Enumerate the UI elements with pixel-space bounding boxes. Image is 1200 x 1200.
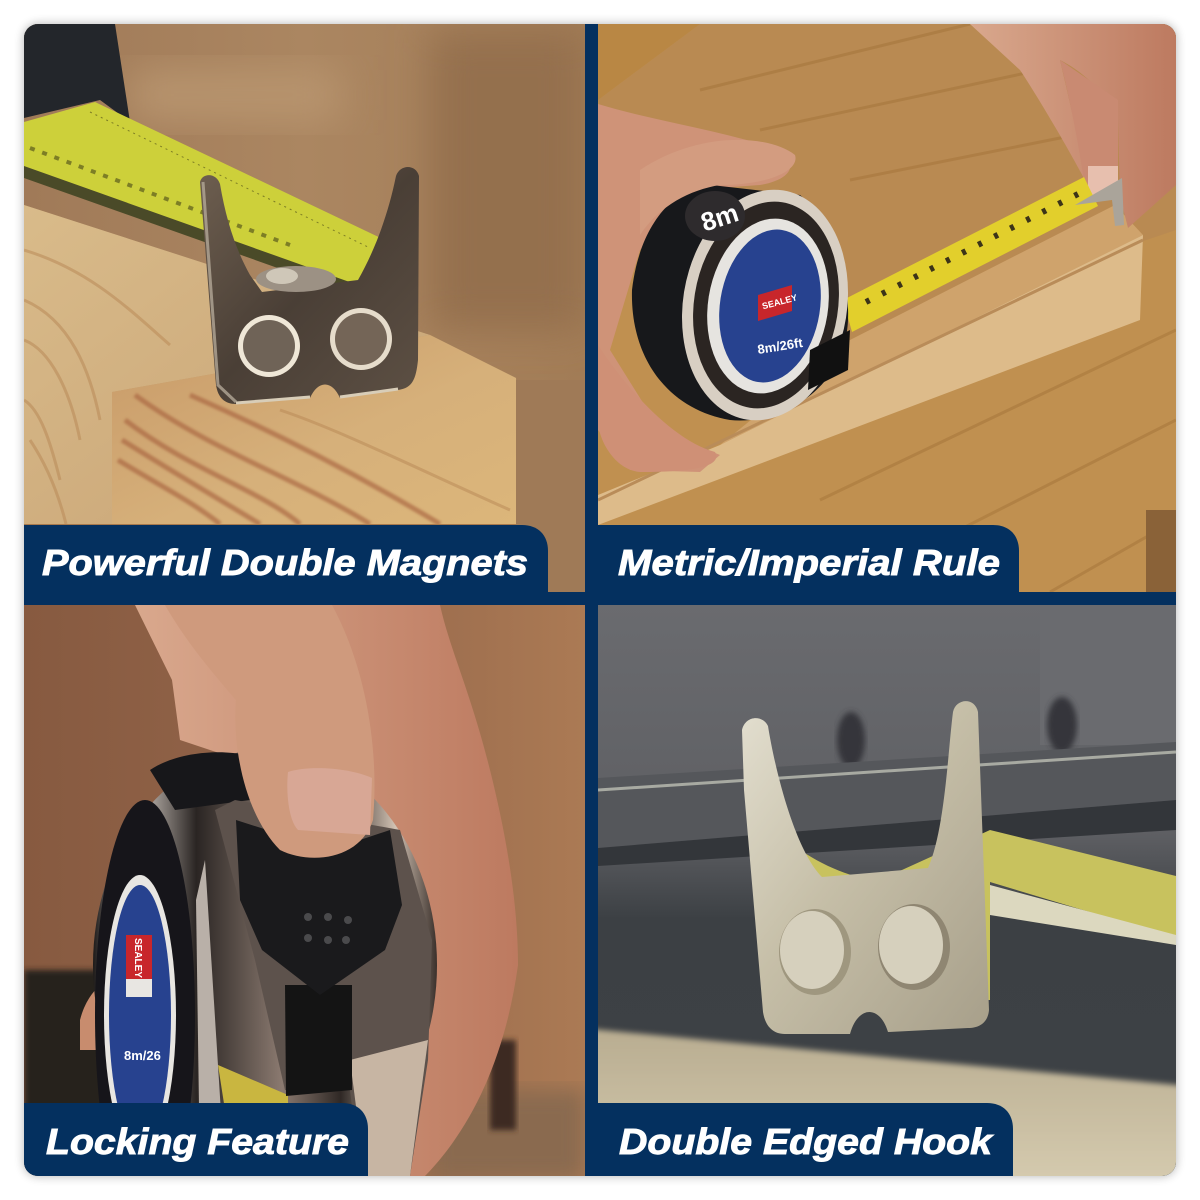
tape body [93, 752, 437, 1104]
panel: locking feature photo: SEALEY [132, 938, 143, 978]
caption: powerful double magnets: Powerful Double Magnets [42, 542, 528, 583]
caption: locking feature [24, 1103, 368, 1176]
yellow tape [843, 177, 1098, 332]
locking slider [285, 985, 352, 1096]
fingers bottom [600, 401, 716, 472]
side blue label [95, 800, 195, 1103]
hook [742, 701, 989, 1034]
left hand [598, 104, 790, 472]
panel: locking feature photo [24, 605, 585, 1200]
caption: metric/imperial rule [598, 525, 1019, 593]
magnets [238, 315, 300, 377]
yellow tape behind [800, 830, 1176, 1000]
hook plate [200, 167, 419, 404]
panel: metric/imperial rule photo: 8m/26ft [756, 335, 804, 357]
panel: double edged hook photo [598, 605, 1176, 1176]
sand foreground [598, 1026, 1176, 1176]
hand [135, 605, 518, 1176]
caption: double edged hook [598, 1103, 1013, 1176]
caption: powerful double magnets [24, 525, 548, 593]
panel: metric/imperial rule photo: SEALEY [761, 292, 798, 311]
caption: double edged hook: Double Edged Hook [619, 1121, 994, 1162]
tape case [632, 185, 848, 420]
yellow tape [24, 102, 385, 292]
panel: locking feature photo: 8m/26 [124, 1048, 161, 1063]
caption: locking feature: Locking Feature [46, 1121, 349, 1162]
thumb [640, 140, 796, 235]
metal rail [598, 742, 1176, 848]
panel: powerful double magnets photo [24, 24, 585, 594]
thumb [165, 605, 375, 858]
wooden batten [720, 205, 1143, 445]
timber block [24, 205, 522, 592]
magnets [779, 909, 851, 995]
right hand [970, 24, 1176, 228]
caption: metric/imperial rule: Metric/Imperial Rule [618, 542, 1000, 583]
panel: metric/imperial rule photo [598, 24, 1176, 592]
text on case: 8m [697, 197, 742, 237]
